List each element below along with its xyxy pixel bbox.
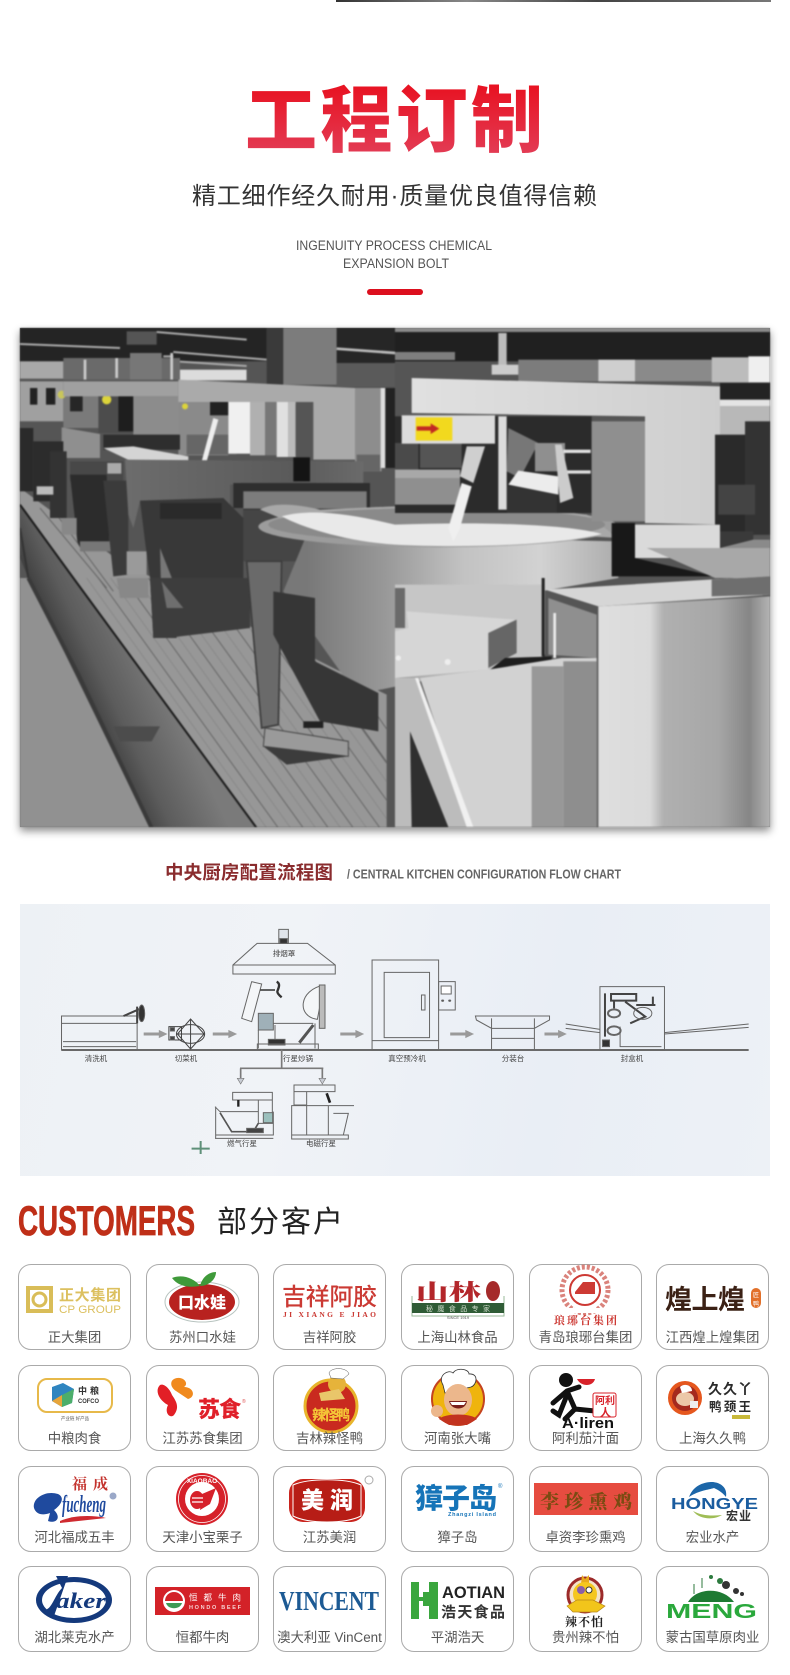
card: 上海久久鸭: 鸭颈王 (709, 1399, 751, 1414)
card: 吉林辣怪鸭 (273, 1365, 386, 1451)
base line (62, 1049, 749, 1051)
card: 吉祥阿胶: 吉祥阿胶 (303, 1330, 356, 1345)
card: 湖北莱克水产: aker (56, 1588, 107, 1613)
card: 阿利茄汁面: A·liren (562, 1415, 614, 1432)
card: 湖北莱克水产: 湖北莱克水产 (34, 1630, 115, 1645)
card: 恒都牛肉: 恒都牛肉 (176, 1630, 229, 1645)
machine: gas planetary (215, 1092, 273, 1138)
main kettle body (283, 535, 618, 695)
machine: washer (62, 1005, 145, 1050)
ceiling left (20, 328, 267, 361)
card: 苏州口水娃 (146, 1264, 259, 1350)
box under gantry (635, 525, 720, 558)
card: 卓资李珍熏鸡: 卓资李珍熏鸡 (545, 1530, 626, 1545)
card: 正大集团: 正大集团 (48, 1330, 101, 1345)
flow chart heading: 中央厨房配置流程图 (165, 862, 333, 883)
card: 宏业水产: 宏业水产 (686, 1530, 739, 1545)
main kettle rim (258, 512, 616, 548)
card: 中粮肉食: COFCO (78, 1399, 99, 1405)
card: 蒙古国草原肉业 (656, 1566, 769, 1652)
card: 江苏苏食集团: 苏食 (198, 1397, 242, 1422)
machine: packing table (475, 1016, 550, 1050)
card: 宏业水产: 宏业 (726, 1508, 751, 1523)
card: 贵州辣不怕: 贵州辣不怕 (552, 1630, 619, 1645)
gutter and left floor (20, 578, 150, 828)
card: 恒都牛肉: HONDO BEEF (189, 1605, 242, 1611)
far frames (20, 428, 33, 491)
card: 宏业水产 (656, 1466, 769, 1552)
card: 阿利茄汁面: 人 (600, 1406, 611, 1419)
card: 獐子岛: 獐子岛 (415, 1482, 497, 1514)
card: 中粮肉食: 中粮 (78, 1385, 99, 1396)
card: 上海久久鸭: 上海久久鸭 (679, 1431, 746, 1446)
english subtitle: INGENUITY PROCESS CHEMICAL (296, 238, 492, 253)
english subtitle: EXPANSION BOLT (343, 256, 449, 271)
card: 阿利茄汁面: 阿利茄汁面 (552, 1431, 619, 1446)
far rims (103, 435, 180, 450)
card: 贵州辣不怕: 辣不怕 (565, 1614, 603, 1629)
flow chart labels: 封盒机 (621, 1053, 644, 1063)
card: 平湖浩天: 浩天食品 (441, 1603, 505, 1621)
subtitle: 精工细作经久耐用·质量优良值得信赖 (192, 183, 597, 210)
card: 江西煌上煌集团: 煌上煌 (665, 1285, 745, 1315)
card: 蒙古国草原肉业: MENG (666, 1601, 757, 1623)
card: 上海山林食品: 上海山林食品 (417, 1330, 498, 1345)
card: 河北福成五丰: 福成 (72, 1475, 108, 1493)
english subtitle (296, 238, 492, 271)
card: 江西煌上煌集团 (656, 1264, 769, 1350)
card: 江苏苏食集团: ® (242, 1398, 246, 1405)
card: 正大集团: CP GROUP (59, 1304, 121, 1316)
card: 江苏美润: 美润 (301, 1487, 353, 1513)
card: 湖北莱克水产 (18, 1566, 131, 1652)
card: 上海山林食品: 山林 (416, 1280, 481, 1305)
card: 澳大利亚 VinCent: 澳大利亚 VinCent (277, 1630, 382, 1645)
card: 江苏美润: 江苏美润 (303, 1530, 356, 1545)
near gantry (395, 416, 592, 513)
card: 卓资李珍熏鸡 (529, 1466, 642, 1552)
flow chart labels: 电磁行星 (306, 1138, 336, 1148)
card: 吉祥阿胶: JI XIANG E JIAO (283, 1310, 376, 1319)
card: 天津小宝栗子 (146, 1466, 259, 1552)
flow chart heading: / CENTRAL KITCHEN CONFIGURATION FLOW CHART (347, 866, 621, 882)
card: 江苏苏食集团: 江苏苏食集团 (162, 1431, 243, 1446)
card: 中粮肉食: 中粮肉食 (48, 1431, 101, 1446)
card: 獐子岛: 獐子岛 (437, 1530, 478, 1545)
card: 獐子岛: ® (498, 1483, 503, 1490)
card: 青岛琅琊台集团: 青岛琅琊台集团 (539, 1330, 632, 1345)
machine: cutter (169, 1019, 205, 1049)
card: 苏州口水娃: 口水娃 (178, 1293, 226, 1312)
card: 平湖浩天 (401, 1566, 514, 1652)
flow chart labels: 排烟罩 (273, 948, 296, 958)
card: 蒙古国草原肉业: 蒙古国草原肉业 (666, 1630, 759, 1645)
customers heading: 部分客户 (217, 1206, 343, 1239)
kettle lower (394, 584, 546, 656)
flow arrows (144, 1031, 566, 1037)
top photo strip (336, 0, 771, 2)
card: 上海久久鸭: 久久丫 (708, 1381, 752, 1397)
flow chart diagram (61, 928, 749, 1154)
card: 吉祥阿胶 (273, 1264, 386, 1350)
card: 江西煌上煌集团: 匠 (753, 1292, 759, 1299)
machine: sealer (566, 987, 749, 1050)
machine: electromagnetic planetary (292, 1085, 354, 1139)
card: 天津小宝栗子: XIAOBAO (187, 1478, 217, 1485)
card: 江苏美润 (273, 1466, 386, 1552)
flow chart labels: 真空预冷机 (388, 1053, 426, 1063)
photo shadow (20, 328, 770, 827)
card: 河北福成五丰 (18, 1466, 131, 1552)
card: 吉林辣怪鸭: 吉林辣怪鸭 (296, 1431, 363, 1446)
title: 工程订制 (245, 82, 543, 162)
front table (395, 611, 515, 678)
machine: vacuum cooler (372, 960, 455, 1050)
card: 阿利茄汁面 (529, 1365, 642, 1451)
right background (720, 383, 770, 400)
card: 上海久久鸭 (656, 1365, 769, 1451)
left cluster (20, 381, 63, 421)
second kettle (394, 477, 461, 506)
card: 河南张大嘴: 河南张大嘴 (424, 1431, 491, 1446)
flow chart heading (165, 862, 621, 883)
card: 宏业水产: HONGYE (671, 1496, 758, 1513)
kettle front frame (247, 561, 282, 728)
card: 正大集团 (18, 1264, 131, 1350)
card: 上海山林食品: 秘魔食品专家 (426, 1304, 490, 1313)
card: 卓资李珍熏鸡: 李珍熏鸡 (540, 1490, 632, 1513)
card: 天津小宝栗子: 天津小宝栗子 (162, 1530, 243, 1545)
card: 獐子岛: Zhangzi Island (448, 1512, 496, 1518)
red accent bar (367, 289, 423, 295)
flow chart labels (85, 948, 644, 1148)
mixer (460, 446, 485, 483)
card: 苏州口水娃: 苏州口水娃 (169, 1330, 236, 1345)
machine: planetary wok (242, 982, 325, 1049)
card: 獐子岛 (401, 1466, 514, 1552)
third kettle (125, 460, 363, 528)
machine: exhaust hood (233, 929, 335, 974)
branch lines (237, 1049, 326, 1084)
card: 阿利茄汁面: 阿利 (595, 1394, 615, 1407)
card: 青岛琅琊台集团 (529, 1264, 642, 1350)
card: 平湖浩天: 平湖浩天 (431, 1630, 484, 1645)
card: 贵州辣不怕 (529, 1566, 642, 1652)
flow chart labels: 燃气行星 (227, 1138, 257, 1148)
flow chart labels: 行星炒锅 (283, 1053, 313, 1063)
card: 正大集团: 正大集团 (59, 1286, 121, 1304)
card: 青岛琅琊台集团: 琅琊台集团 (554, 1313, 617, 1327)
right cabinet (545, 576, 770, 606)
card: 上海山林食品 (401, 1264, 514, 1350)
flow chart labels: 分装台 (502, 1053, 524, 1063)
customers heading: CUSTOMERS (18, 1197, 195, 1244)
flow chart labels: 清洗机 (85, 1053, 108, 1063)
flow chart panel (20, 904, 770, 1176)
far gantry (63, 381, 178, 396)
card: 恒都牛肉: 恒都牛肉 (189, 1592, 241, 1602)
card: 江苏苏食集团 (146, 1365, 259, 1451)
registration cross (192, 1141, 210, 1154)
card: 河北福成五丰: fucheng (62, 1492, 106, 1518)
card: 江西煌上煌集团: 江西煌上煌集团 (666, 1330, 759, 1345)
card: 河南张大嘴 (401, 1365, 514, 1451)
card: 中粮肉食 (18, 1365, 131, 1451)
card: 吉祥阿胶: 吉祥阿胶 (282, 1284, 377, 1311)
card: 江西煌上煌集团: 鸭 (753, 1300, 759, 1308)
card: 吉林辣怪鸭: 辣怪鸭 (312, 1407, 350, 1423)
planetary wok and branch machines (214, 980, 354, 1140)
card: 恒都牛肉 (146, 1566, 259, 1652)
card: 河北福成五丰: 河北福成五丰 (34, 1530, 115, 1545)
card: 中粮肉食: 产业链 好产品 (61, 1415, 90, 1422)
tiled floor (20, 488, 387, 828)
card: 平湖浩天: AOTIAN (442, 1583, 505, 1602)
card: 澳大利亚 VinCent (273, 1566, 386, 1652)
card: 澳大利亚 VinCent: VINCENT (279, 1586, 379, 1616)
ceiling right (395, 328, 770, 361)
card: 上海山林食品: SINCE 1919 (447, 1315, 470, 1320)
flow chart labels: 切菜机 (175, 1053, 198, 1063)
photo: cooking kettles production line (19, 327, 771, 828)
